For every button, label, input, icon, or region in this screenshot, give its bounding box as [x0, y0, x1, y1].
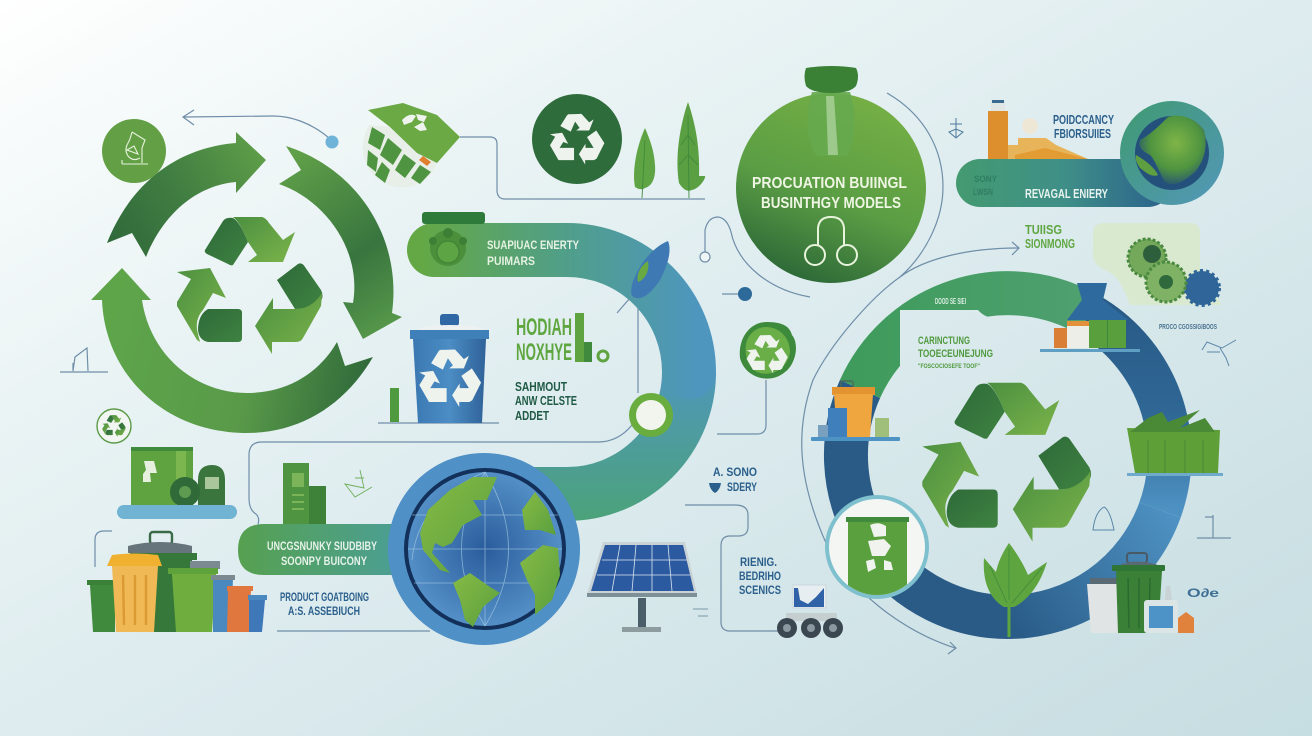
text: product label [280, 590, 369, 618]
icon: striped fan illustration [363, 103, 460, 188]
text: ring label: DOOD SE SIEI [935, 297, 966, 306]
tab: banner top [422, 212, 485, 224]
text: banner label: SOONPY BUICONY [281, 554, 367, 568]
icon: factory and mound [988, 100, 1088, 159]
icon: network nodes [805, 217, 857, 265]
text: services label: RIENIG. [740, 555, 777, 569]
text: policy label: POIDCCANCY [1053, 112, 1114, 127]
band: lower right segment [1008, 510, 1160, 617]
chart: small bars [575, 313, 608, 362]
heading: model title: PROCUATION BUIINGL [752, 175, 907, 192]
icon: globe [388, 453, 580, 645]
band: lower curve [530, 372, 689, 494]
icon: two leaf trees [634, 102, 705, 198]
text: services label: SCENICS [739, 583, 781, 597]
icon: green bin group on shelf [117, 447, 237, 519]
icon: green recycle blob [740, 322, 796, 379]
left recycling ring [91, 132, 402, 433]
panel: bottom-left banner [238, 463, 400, 575]
icon: small loop node [700, 252, 710, 262]
text: faded banner label: LWSN [973, 187, 993, 197]
icon: building blocks [283, 463, 326, 524]
text: inset label: CARINCTUNG [918, 335, 970, 347]
band: upper right segment [1089, 315, 1170, 510]
icon: solar panel [587, 542, 697, 632]
text: green chart label [516, 314, 572, 366]
text: faded banner label [973, 174, 997, 197]
text: banner label: SUAPIUAC ENERTY [487, 240, 579, 252]
icon: blue recycling bin [410, 314, 489, 423]
text: A. SONO label: SDERY [727, 480, 757, 494]
thin connector lines [60, 93, 1231, 654]
text: banner label: PUIMARS [487, 256, 535, 268]
text: banner label: REVAGAL ENIERY [1025, 186, 1108, 201]
icon: blue node [738, 287, 752, 301]
text: green chart label: NOXHYE [516, 339, 572, 366]
text: green chart label: HODIAH [516, 314, 572, 341]
panel: gears illustration [1093, 223, 1222, 305]
icon: central recycle symbol [177, 217, 322, 354]
icon: banner emblem [429, 228, 467, 266]
icon: bins on top shelf [1040, 283, 1140, 352]
text: green label: SIONMONG [1025, 237, 1075, 251]
text: product label: A:S. ASSEBIUCH [288, 604, 360, 618]
decorative dashes [693, 609, 708, 616]
band: top banner and arc [434, 250, 689, 372]
text: banner label: UNCGSNUNKY SIUDBIBY [267, 539, 377, 553]
text: banner label [267, 539, 377, 568]
text: services label [739, 555, 781, 597]
text block: dark green caption: ANW CELSTE [515, 393, 577, 408]
icon: small recycle ring [97, 409, 131, 443]
icon: bell outline [1093, 507, 1114, 530]
text: process label: PROCO CGOSSIGIBOOS [1159, 322, 1217, 331]
icon: small network sketch [1202, 340, 1236, 366]
text: inset label: TOOECEUNEJUNG [918, 348, 993, 360]
text: A. SONO label: A. SONO [713, 465, 757, 479]
panel: right circular ring [846, 293, 1170, 617]
icon: bins on left shelf [811, 381, 900, 441]
band: top green segment [860, 293, 1089, 389]
text block: dark green caption: ADDET [515, 408, 549, 423]
icon: small sketch [345, 470, 372, 497]
text block: dark green caption [515, 379, 577, 423]
icon: small anchor [949, 118, 963, 138]
text: green label [1025, 223, 1075, 251]
icon: green crate [1127, 410, 1223, 476]
icon: green circle badge top-left [102, 119, 166, 183]
panel: renewable energy banner [956, 100, 1224, 207]
icon: bin pile [87, 532, 267, 632]
panel: central business models circle [736, 66, 926, 283]
icon: small green bar [390, 388, 399, 422]
text: green label: TUIISG [1025, 223, 1062, 237]
icon: green bin in circle [827, 497, 927, 602]
arrow: top connector with dot [183, 110, 338, 148]
icon: robot cart [777, 585, 843, 638]
text: banner label [487, 240, 579, 268]
text: A. SONO label [713, 465, 757, 494]
panel: flow band S-curve [422, 212, 689, 494]
panel: inset notch [900, 310, 995, 372]
icon: green ring node [629, 393, 673, 437]
arrow: bottom ring arrow [91, 268, 373, 433]
text block: dark green caption: SAHMOUT [515, 379, 567, 394]
band: left dark segment [846, 389, 1008, 617]
icon: globe circle [1120, 101, 1224, 205]
icon: dark recycle circle [532, 94, 622, 184]
text: faded banner label: SONY [974, 174, 997, 184]
arrow: right ring arrow [279, 146, 402, 339]
text: policy label [1053, 112, 1114, 141]
icon: central recycle symbol [922, 383, 1091, 542]
icon: plant [984, 543, 1047, 637]
heading: model title [752, 175, 907, 212]
text: inset label [918, 335, 993, 370]
text: small symbols: O∂e [1187, 586, 1219, 600]
icon: bottle [804, 66, 858, 156]
arrow: top-left ring arrow [107, 132, 266, 257]
text: policy label: FBIORSUIIES [1054, 126, 1111, 141]
text: product label: PRODUCT GOATBOING [280, 590, 369, 604]
icon: blue leaf on band [631, 241, 670, 298]
icon: shield [709, 483, 721, 493]
icon: bottom-right bins [1087, 553, 1194, 633]
heading: model title: BUSINTHGY MODELS [761, 195, 901, 212]
text: inset label: "FOSCOCIOSEFE TOOF" [918, 363, 980, 370]
text: services label: BEDRIHO [739, 569, 781, 583]
